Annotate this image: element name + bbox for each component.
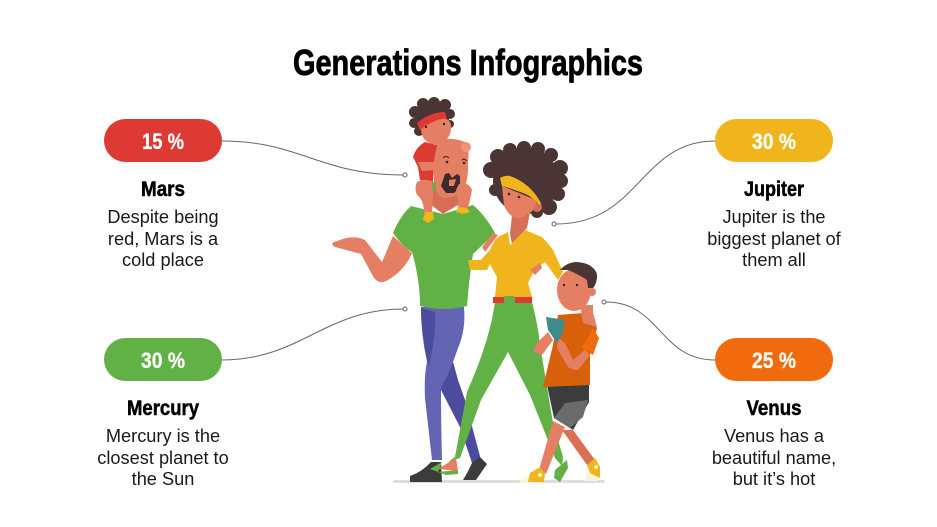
text: Mercury description: Mercury is the — [106, 426, 220, 446]
heading: Mars: Mars — [141, 178, 185, 201]
text: Mercury description: closest planet to — [97, 448, 229, 468]
text: Mars description: cold place — [122, 250, 204, 270]
heading: Mercury: Mercury — [127, 397, 199, 420]
text: Jupiter description: them all — [742, 250, 806, 270]
panel: Mars — [104, 119, 407, 270]
badge: Mars 15% — [104, 119, 222, 162]
badge: Jupiter 30%: 30 % — [752, 129, 796, 154]
connector: Mars — [222, 141, 407, 177]
panel: Venus — [602, 300, 836, 489]
title: Generations Infographics — [293, 42, 643, 83]
badge: Mercury 30% — [104, 338, 222, 381]
text: Jupiter description: Jupiter is the — [722, 207, 826, 227]
panel: Jupiter — [552, 119, 842, 270]
figure: woman — [430, 141, 568, 482]
badge: Jupiter 30% — [715, 119, 833, 162]
figure: man — [332, 139, 495, 482]
illustration: family — [332, 97, 605, 483]
heading: Venus: Venus — [746, 397, 802, 420]
badge: Venus 25%: 25 % — [752, 348, 796, 373]
badge: Mars 15%: 15 % — [142, 129, 184, 154]
text: Venus description: beautiful name, — [712, 448, 836, 468]
connector: Jupiter — [552, 141, 715, 226]
figure: boy — [520, 262, 600, 483]
connector: Venus — [602, 300, 715, 360]
figure: child on shoulders — [409, 97, 472, 223]
text: Jupiter description: biggest planet of — [707, 229, 842, 249]
text: Mars description: red, Mars is a — [108, 229, 219, 249]
heading: Jupiter: Jupiter — [744, 178, 804, 201]
panel: Mercury — [97, 307, 407, 489]
connector: Mercury — [222, 307, 407, 360]
ground shadow — [393, 480, 605, 483]
text: Venus description: but it’s hot — [733, 469, 815, 489]
badge: Mercury 30%: 30 % — [141, 348, 185, 373]
text: Mercury description: the Sun — [132, 469, 194, 489]
badge: Venus 25% — [715, 338, 833, 381]
text: Venus description: Venus has a — [724, 426, 825, 446]
text: Mars description: Despite being — [107, 207, 219, 227]
